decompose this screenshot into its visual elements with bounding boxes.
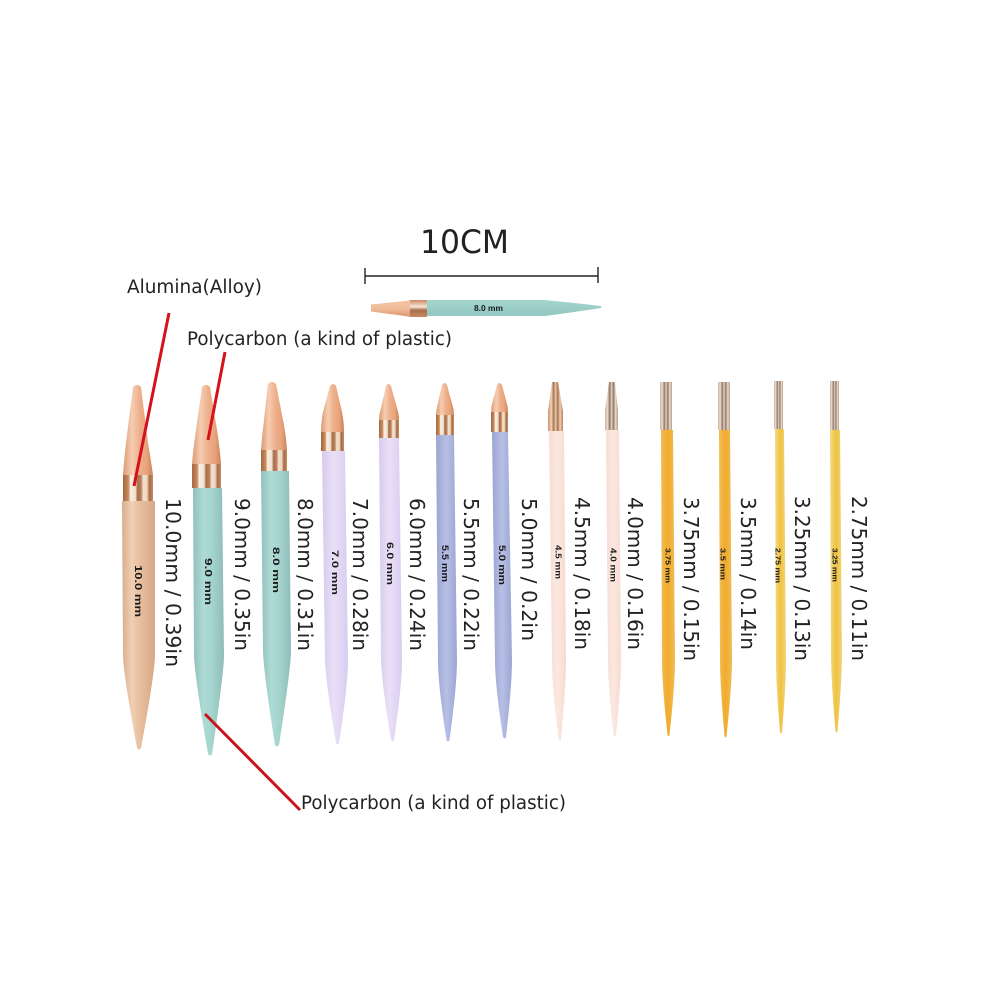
size labels, rotated: 5.5mm / 0.22in — [459, 498, 483, 651]
size labels, rotated: 9.0mm / 0.35in — [230, 498, 254, 651]
size labels, rotated: 2.75mm / 0.11in — [847, 496, 871, 661]
needle 3.5 mm — [718, 382, 732, 738]
needle 4.5 mm — [548, 382, 566, 740]
needle 5.0 mm — [491, 383, 512, 738]
reference needle, horizontal — [371, 300, 601, 317]
size labels, rotated: 6.0mm / 0.24in — [405, 498, 429, 651]
needle 5.5 mm — [436, 383, 457, 742]
needle 9.0 mm — [192, 385, 224, 756]
size labels, rotated: 10.0mm / 0.39in — [161, 498, 185, 667]
needle 4.0 mm — [605, 382, 621, 736]
needle 3.75 mm — [660, 382, 675, 736]
size labels, rotated: 7.0mm / 0.28in — [348, 498, 372, 651]
needle 8.0 mm: 8.0 mm — [270, 547, 281, 593]
needle 3.25 mm — [774, 381, 786, 734]
size labels, rotated: 4.5mm / 0.18in — [570, 497, 594, 650]
needle 7.0 mm — [321, 384, 348, 744]
size labels, rotated — [161, 496, 871, 667]
needle 7.0 mm: 7.0 mm — [329, 550, 340, 595]
callout label: upper polycarbon: Polycarbon (a kind of plastic) — [187, 329, 452, 350]
size labels, rotated: 3.5mm / 0.14in — [736, 497, 760, 650]
needle 8.0 mm — [261, 382, 291, 746]
needle 10.0 mm — [122, 385, 155, 750]
size labels, rotated: 4.0mm / 0.16in — [623, 497, 647, 650]
needle 6.0 mm: 6.0 mm — [384, 542, 395, 585]
scale bracket — [365, 267, 598, 284]
needle 4.0 mm: 4.0 mm — [608, 548, 618, 583]
needle 2.75 mm — [830, 381, 842, 732]
reference needle, horizontal: 8.0 mm — [474, 303, 503, 313]
needle 4.5 mm: 4.5 mm — [554, 545, 564, 580]
callout leader: upper polycarbon — [208, 352, 225, 440]
needle 9.0 mm: 9.0 mm — [202, 558, 213, 605]
needle 3.25 mm: 2.75 mm — [774, 548, 782, 583]
callout leader: alumina — [134, 313, 169, 486]
size labels, rotated: 3.25mm / 0.13in — [790, 496, 814, 661]
scale heading: 10CM: 10CM — [420, 223, 509, 261]
needle 2.75 mm: 3.25 mm — [830, 548, 840, 582]
needle 3.5 mm: 3.5 mm — [718, 548, 728, 580]
callout label: alumina: Alumina(Alloy) — [127, 277, 262, 298]
needle 5.5 mm: 5.5 mm — [440, 545, 450, 582]
needle 10.0 mm: 10.0 mm — [132, 565, 144, 617]
needle 3.75 mm: 3.75 mm — [664, 548, 672, 583]
callout leader: lower polycarbon — [205, 714, 300, 810]
size labels, rotated: 5.0mm / 0.2in — [517, 498, 541, 641]
size labels, rotated: 3.75mm / 0.15in — [679, 497, 703, 661]
needle 5.0 mm: 5.0 mm — [497, 545, 507, 585]
needle 6.0 mm — [379, 384, 402, 742]
size labels, rotated: 8.0mm / 0.31in — [293, 498, 317, 651]
callout label: lower polycarbon: Polycarbon (a kind of plastic) — [301, 793, 566, 814]
